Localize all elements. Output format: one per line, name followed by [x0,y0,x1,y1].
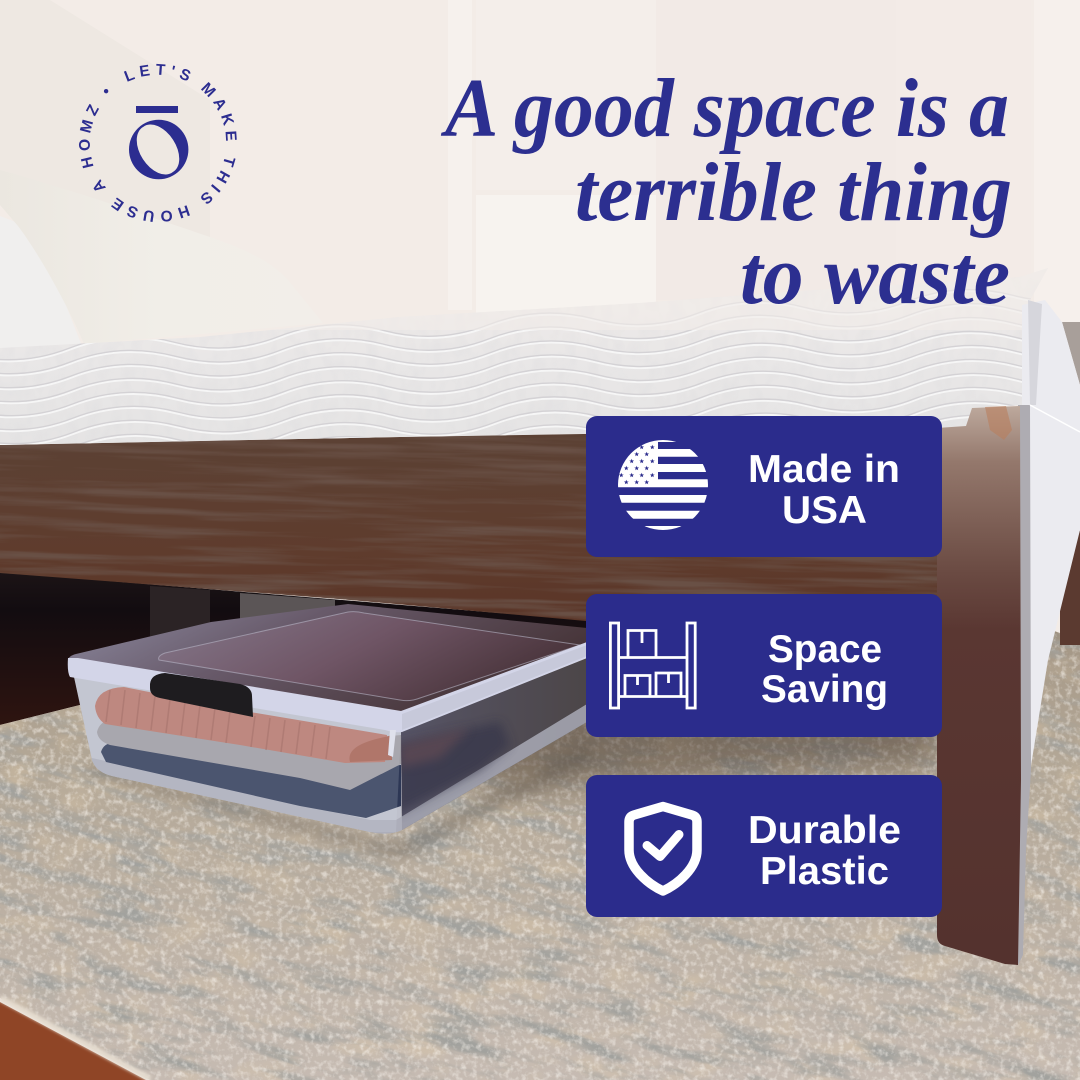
label: Durable [748,809,901,852]
folded grey garment [97,721,401,790]
label: Saving [761,668,888,711]
label [748,448,900,532]
label: USA [782,489,867,532]
background photo: bedroom scene [0,289,1080,1080]
rug [0,590,1080,1080]
icon: shelf with boxes [610,623,695,708]
right side clear panel and floor [1018,300,1080,965]
shadow under bed [0,572,586,725]
circular slogan: LET'S MAKE THIS HOUSE A HOMZ • [78,64,237,222]
logo mark [129,106,188,179]
black latch [150,673,253,717]
label [748,809,901,893]
headline: A good space is a [440,62,1009,155]
label: Space [768,628,882,671]
lid [68,604,587,757]
folded pink garment [95,687,392,763]
wall and windows [0,0,1080,420]
pillows [0,170,323,350]
icon: shield with check [629,806,697,891]
label: Plastic [760,850,889,893]
folded navy garment [101,743,401,818]
headline: to waste [740,229,1010,322]
clothes seen through side of box [395,722,510,815]
bed leg [937,406,1021,965]
storage box with folded clothes [68,604,592,860]
label: Made in [748,448,900,491]
label [761,628,888,711]
icon: American flag circle [618,440,710,534]
feature panel: Durable Plastic [586,775,942,917]
bed frame rail [0,434,937,621]
headline [440,62,1012,322]
rug border and wood floor [0,998,150,1080]
box shadow [90,740,592,860]
logo badge [78,64,237,222]
box body [74,658,587,834]
mattress quilted cover [0,289,1031,445]
feature panel: Made in USA [586,416,942,557]
translucent front panel [74,677,401,832]
feature panel: Space Saving [586,594,942,737]
headline: terrible thing [575,146,1012,239]
